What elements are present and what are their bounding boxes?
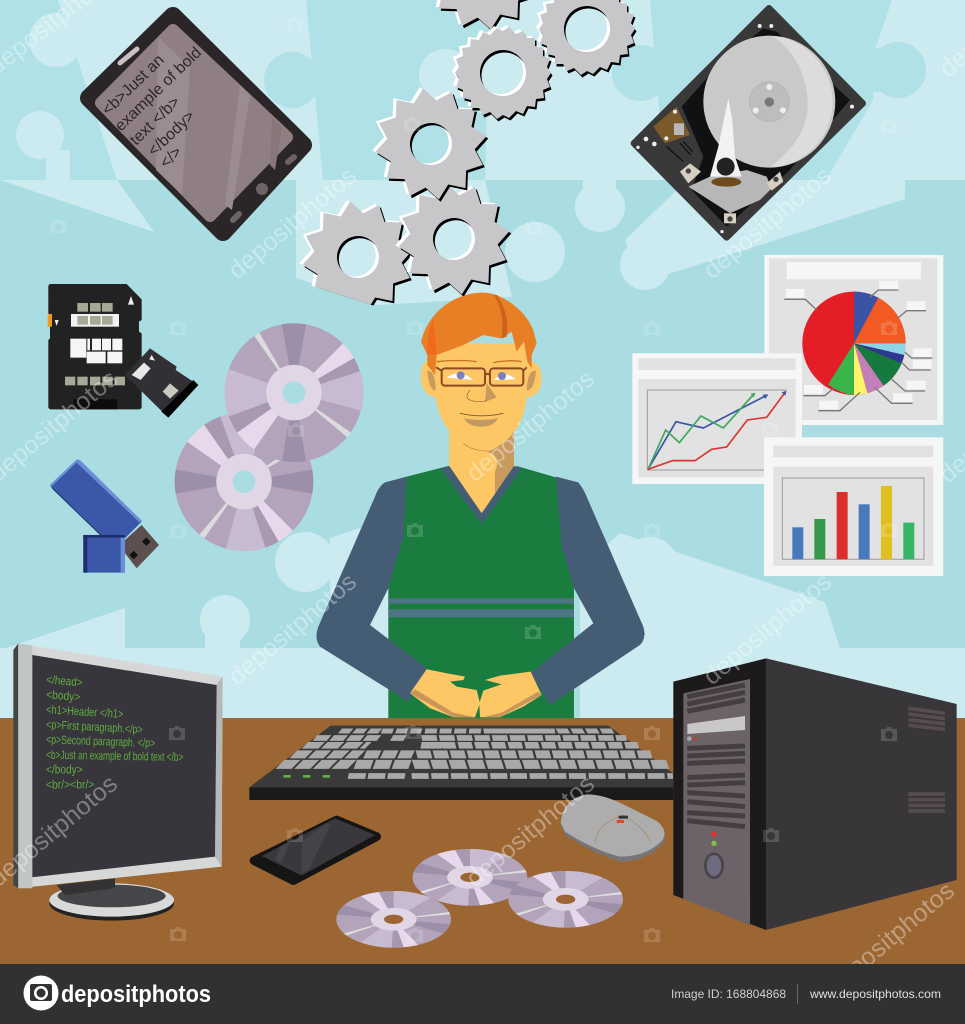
icon: compact disc 2 <box>175 412 313 551</box>
neck <box>449 423 514 515</box>
tablet code text <box>99 44 205 172</box>
icon: SD card <box>48 284 142 409</box>
chart panel: line chart <box>632 353 802 484</box>
person: developer <box>317 293 645 718</box>
tablet code text: text </b> <box>127 93 184 149</box>
tablet code text: </> <box>157 144 185 172</box>
image id: Image ID: 168804868 <box>671 987 786 1001</box>
screen code text: <b>Just an example of bold text </b> <box>46 748 183 764</box>
disc C <box>320 883 467 956</box>
gear 1 <box>300 200 412 306</box>
screen code text: </head> <box>46 672 83 689</box>
disc A <box>396 841 543 914</box>
ears <box>421 362 542 397</box>
forearms <box>317 623 645 705</box>
glasses <box>436 367 527 386</box>
hands <box>410 669 480 717</box>
watermarks: depositphotos <box>698 568 837 691</box>
monitor stand <box>49 878 174 921</box>
icon: hard disk drive <box>634 8 863 237</box>
gear 5 <box>536 0 636 78</box>
eyes and nose <box>447 374 516 380</box>
watermarks: depositphotos <box>461 365 600 488</box>
hair <box>421 293 537 375</box>
tablet code text: <b>Just an <box>99 52 168 119</box>
footer bar <box>0 964 965 1024</box>
keyboard <box>249 726 673 800</box>
screen code text: <body> <box>46 687 81 704</box>
phone <box>254 818 377 881</box>
screen code text: </body> <box>46 763 83 777</box>
desk <box>0 718 965 964</box>
computer tower <box>673 658 957 930</box>
screen code text: <p>First paragraph.</p> <box>46 717 143 736</box>
status lights <box>283 775 330 778</box>
website: www.depositphotos.com <box>809 987 941 1001</box>
screen code text: <h1>Header </h1> <box>46 702 124 721</box>
icon: USB flash drive <box>50 459 159 573</box>
footer logo icon <box>24 976 58 1010</box>
footer brand name: depositphotos <box>61 981 211 1008</box>
face <box>436 343 527 449</box>
chart panel: bar chart <box>764 437 943 576</box>
watermark camera icons <box>50 17 897 942</box>
gear 4 <box>417 0 548 40</box>
mouse <box>561 794 665 862</box>
pie <box>802 292 906 395</box>
tablet code text: </body> <box>145 107 198 160</box>
side vents <box>908 708 945 811</box>
bars <box>792 486 914 559</box>
head bracket <box>688 170 772 213</box>
pie labels <box>786 281 932 409</box>
keys <box>280 731 673 776</box>
screen code text: <p>Second paragraph. </p> <box>46 732 155 750</box>
screen code text <box>46 672 183 792</box>
vest <box>388 466 574 718</box>
tower vents <box>687 685 745 827</box>
watermarks: depositphotos <box>223 568 362 691</box>
lines <box>648 392 786 469</box>
screen <box>32 655 217 877</box>
icon: micro SD card <box>125 348 198 418</box>
gears <box>292 0 636 323</box>
compact discs on desk <box>320 841 639 956</box>
monitor <box>13 643 223 921</box>
gear 2 <box>388 174 519 305</box>
chart panel: pie chart <box>764 255 943 425</box>
tablet code text: example of bold <box>112 44 205 135</box>
icon: compact disc 1 <box>225 323 363 462</box>
watermarks: depositphotos <box>698 162 837 285</box>
icon: tablet <box>89 16 303 232</box>
gear 3 <box>365 79 496 210</box>
upper sleeves <box>317 477 644 647</box>
gear 6 <box>452 25 552 122</box>
disc B <box>492 863 639 936</box>
background: puzzle wall <box>0 0 965 720</box>
watermarks: depositphotos <box>461 770 600 893</box>
screen code text: <br/><br/> <box>46 777 94 792</box>
watermarks: depositphotos <box>821 877 960 1000</box>
mouth <box>460 413 503 416</box>
watermarks: depositphotos <box>223 162 362 285</box>
